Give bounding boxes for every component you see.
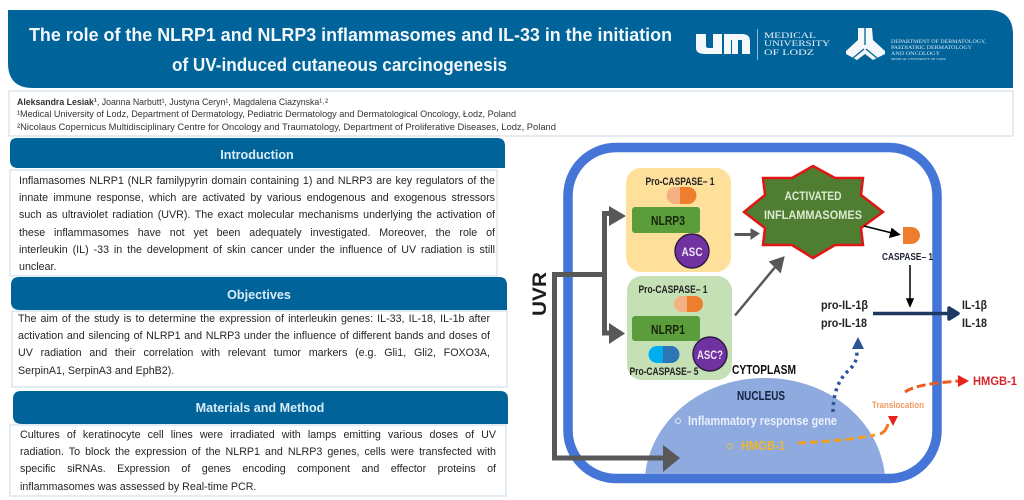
materials text: Cultures of keratinocyte cell lines were irradiated with lamps emitting various doses of UV xyxy=(20,429,496,441)
objectives text: activation and silencing of NLRP1 and NLRP3 under the influence of different bands and doses of xyxy=(18,330,490,342)
panel: introduction xyxy=(10,138,505,277)
arrow: HMGB-1 translocation xyxy=(798,374,1017,443)
title: of UV-induced cutaneous carcinogenesis xyxy=(172,54,507,75)
panel: NLRP1 complex: Pro-CASPASE– 1 xyxy=(638,284,708,296)
activated inflammasomes star xyxy=(744,166,883,258)
mature interleukin labels: IL-18 xyxy=(962,316,987,330)
introduction text: these inflammasomes have not yet been adequately investigated. Moreover, the role of xyxy=(19,227,495,239)
authors box xyxy=(9,91,1013,136)
introduction text xyxy=(19,173,495,277)
materials heading: Materials and Method xyxy=(196,401,324,415)
objectives heading: Objectives xyxy=(227,288,291,302)
logo: department of dermatology: MEDICAL UNIVERSITY OF LODZ xyxy=(891,57,946,61)
nucleus xyxy=(645,378,885,483)
activated inflammasomes star: INFLAMMASOMES xyxy=(764,208,862,222)
pro-interleukin labels: pro-IL-1β xyxy=(821,298,868,312)
cytoplasm label: CYTOPLASM xyxy=(732,363,796,377)
panel: NLRP1 complex xyxy=(627,276,732,380)
logo: department of dermatology: PAEDIATRIC DERMATOLOGY xyxy=(891,46,972,51)
title banner xyxy=(8,10,1013,88)
objectives text: UV radiation and their correlation with relevant tumor markers (e.g. Gli1, Gli2, FOXO3A, xyxy=(18,347,490,359)
affiliation 2: ²Nicolaus Copernicus Multidisciplinary Centre for Oncology and Traumatology, Department of Proliferative Diseases, Lodz, Poland xyxy=(17,122,556,133)
arrow: maturation xyxy=(873,308,958,319)
nucleus: HMGB-1 xyxy=(741,439,785,453)
nucleus: Inflammatory response gene xyxy=(688,414,837,428)
panel: materials and method xyxy=(10,391,508,497)
logo: department of dermatology: DEPARTMENT OF DERMATOLOGY, xyxy=(891,40,986,45)
arrow: HMGB-1 translocation: Translocation xyxy=(872,400,924,411)
introduction heading: Introduction xyxy=(220,148,294,162)
objectives heading xyxy=(11,277,507,310)
panel: NLRP3 complex xyxy=(626,168,731,272)
introduction heading xyxy=(10,138,505,168)
materials text: radiation. To block the expression of the NLRP1 and NLRP3 genes, cells were transfected with xyxy=(20,446,496,458)
arrow: NLRP3 to activated inflammasomes xyxy=(735,229,759,239)
panel: objectives xyxy=(11,277,507,387)
cell membrane xyxy=(568,148,937,478)
UVR label: UVR xyxy=(530,272,551,316)
materials text: specific siRNAs. Expression of genes encoding component and effector proteins of xyxy=(20,463,496,475)
arrow: caspase-1 down xyxy=(907,265,913,306)
logo: Medical University of Lodz: UNIVERSITY xyxy=(764,39,830,48)
author names: Aleksandra Lesiak¹, Joanna Narbutt¹, Justyna Ceryn¹, Magdalena Ciazynska¹˒² xyxy=(17,97,329,108)
panel: NLRP1 complex: ASC? xyxy=(697,348,723,362)
panel: NLRP1 complex: Pro-CASPASE– 5 xyxy=(630,366,698,378)
arrow: HMGB-1 translocation: HMGB-1 xyxy=(973,374,1017,388)
panel: NLRP3 complex: Pro-CASPASE– 1 xyxy=(646,176,714,188)
materials text xyxy=(20,427,496,497)
mature interleukin labels: IL-1β xyxy=(962,298,987,312)
activated inflammasomes star: ACTIVATED xyxy=(784,189,842,203)
nucleus: NUCLEUS xyxy=(737,389,785,403)
introduction text: Inflamasomes NLRP1 (NLR familypyrin domain containing 1) and NLRP3 are key regulators of the xyxy=(19,175,495,187)
arrow: dotted gene expression xyxy=(833,337,864,412)
introduction text: unclear. xyxy=(19,261,56,273)
caspase-1 label: CASPASE– 1 xyxy=(882,252,933,263)
icon: caspase-1 xyxy=(903,227,920,244)
logo: Medical University of Lodz: MEDICAL xyxy=(764,31,816,40)
pro-interleukin labels: pro-IL-18 xyxy=(821,316,867,330)
objectives text: SerpinA1, SerpinA3 and EphB2). xyxy=(18,365,174,377)
panel: NLRP3 complex: ASC xyxy=(682,245,703,259)
introduction text: interleukin (IL) -33 in the development of skin cancer under the influence of UV radiation is still xyxy=(19,244,495,256)
logo: Medical University of Lodz xyxy=(696,29,830,60)
introduction text: such as ultraviolet radiation (UVR). The exact molecular mechanisms underlying the activation of xyxy=(19,209,495,221)
panel: NLRP3 complex: NLRP3 xyxy=(651,214,685,228)
introduction text: innate immune response, which are activated by various endogenous and exogenous stressors xyxy=(19,192,495,204)
affiliation 1: ¹Medical University of Lodz, Department of Dermatology, Pediatric Dermatology and Dermatological Oncology, Łodz, Poland xyxy=(17,109,516,120)
arrow: UVR to inflammasomes and nucleus xyxy=(554,206,680,472)
arrow: inflammasomes to caspase-1 xyxy=(864,226,899,237)
objectives text xyxy=(18,311,490,381)
diagram: inflammasome pathway xyxy=(530,148,1017,483)
title: The role of the NLRP1 and NLRP3 inflammasomes and IL-33 in the initiation xyxy=(29,24,672,45)
materials text: inflammasomes was assessed by Real-time PCR. xyxy=(20,481,256,493)
arrow: NLRP1 to activated inflammasomes xyxy=(735,258,783,316)
objectives text: The aim of the study is to determine the expression of interleukin genes: IL-33, IL-18, IL-1b after xyxy=(18,313,490,325)
panel: NLRP1 complex: NLRP1 xyxy=(651,323,685,337)
logo: Medical University of Lodz: OF LODZ xyxy=(764,48,814,57)
logo: department of dermatology: AND ONCOLOGY xyxy=(891,52,940,57)
materials heading xyxy=(13,391,508,424)
logo: department of dermatology xyxy=(846,28,986,61)
